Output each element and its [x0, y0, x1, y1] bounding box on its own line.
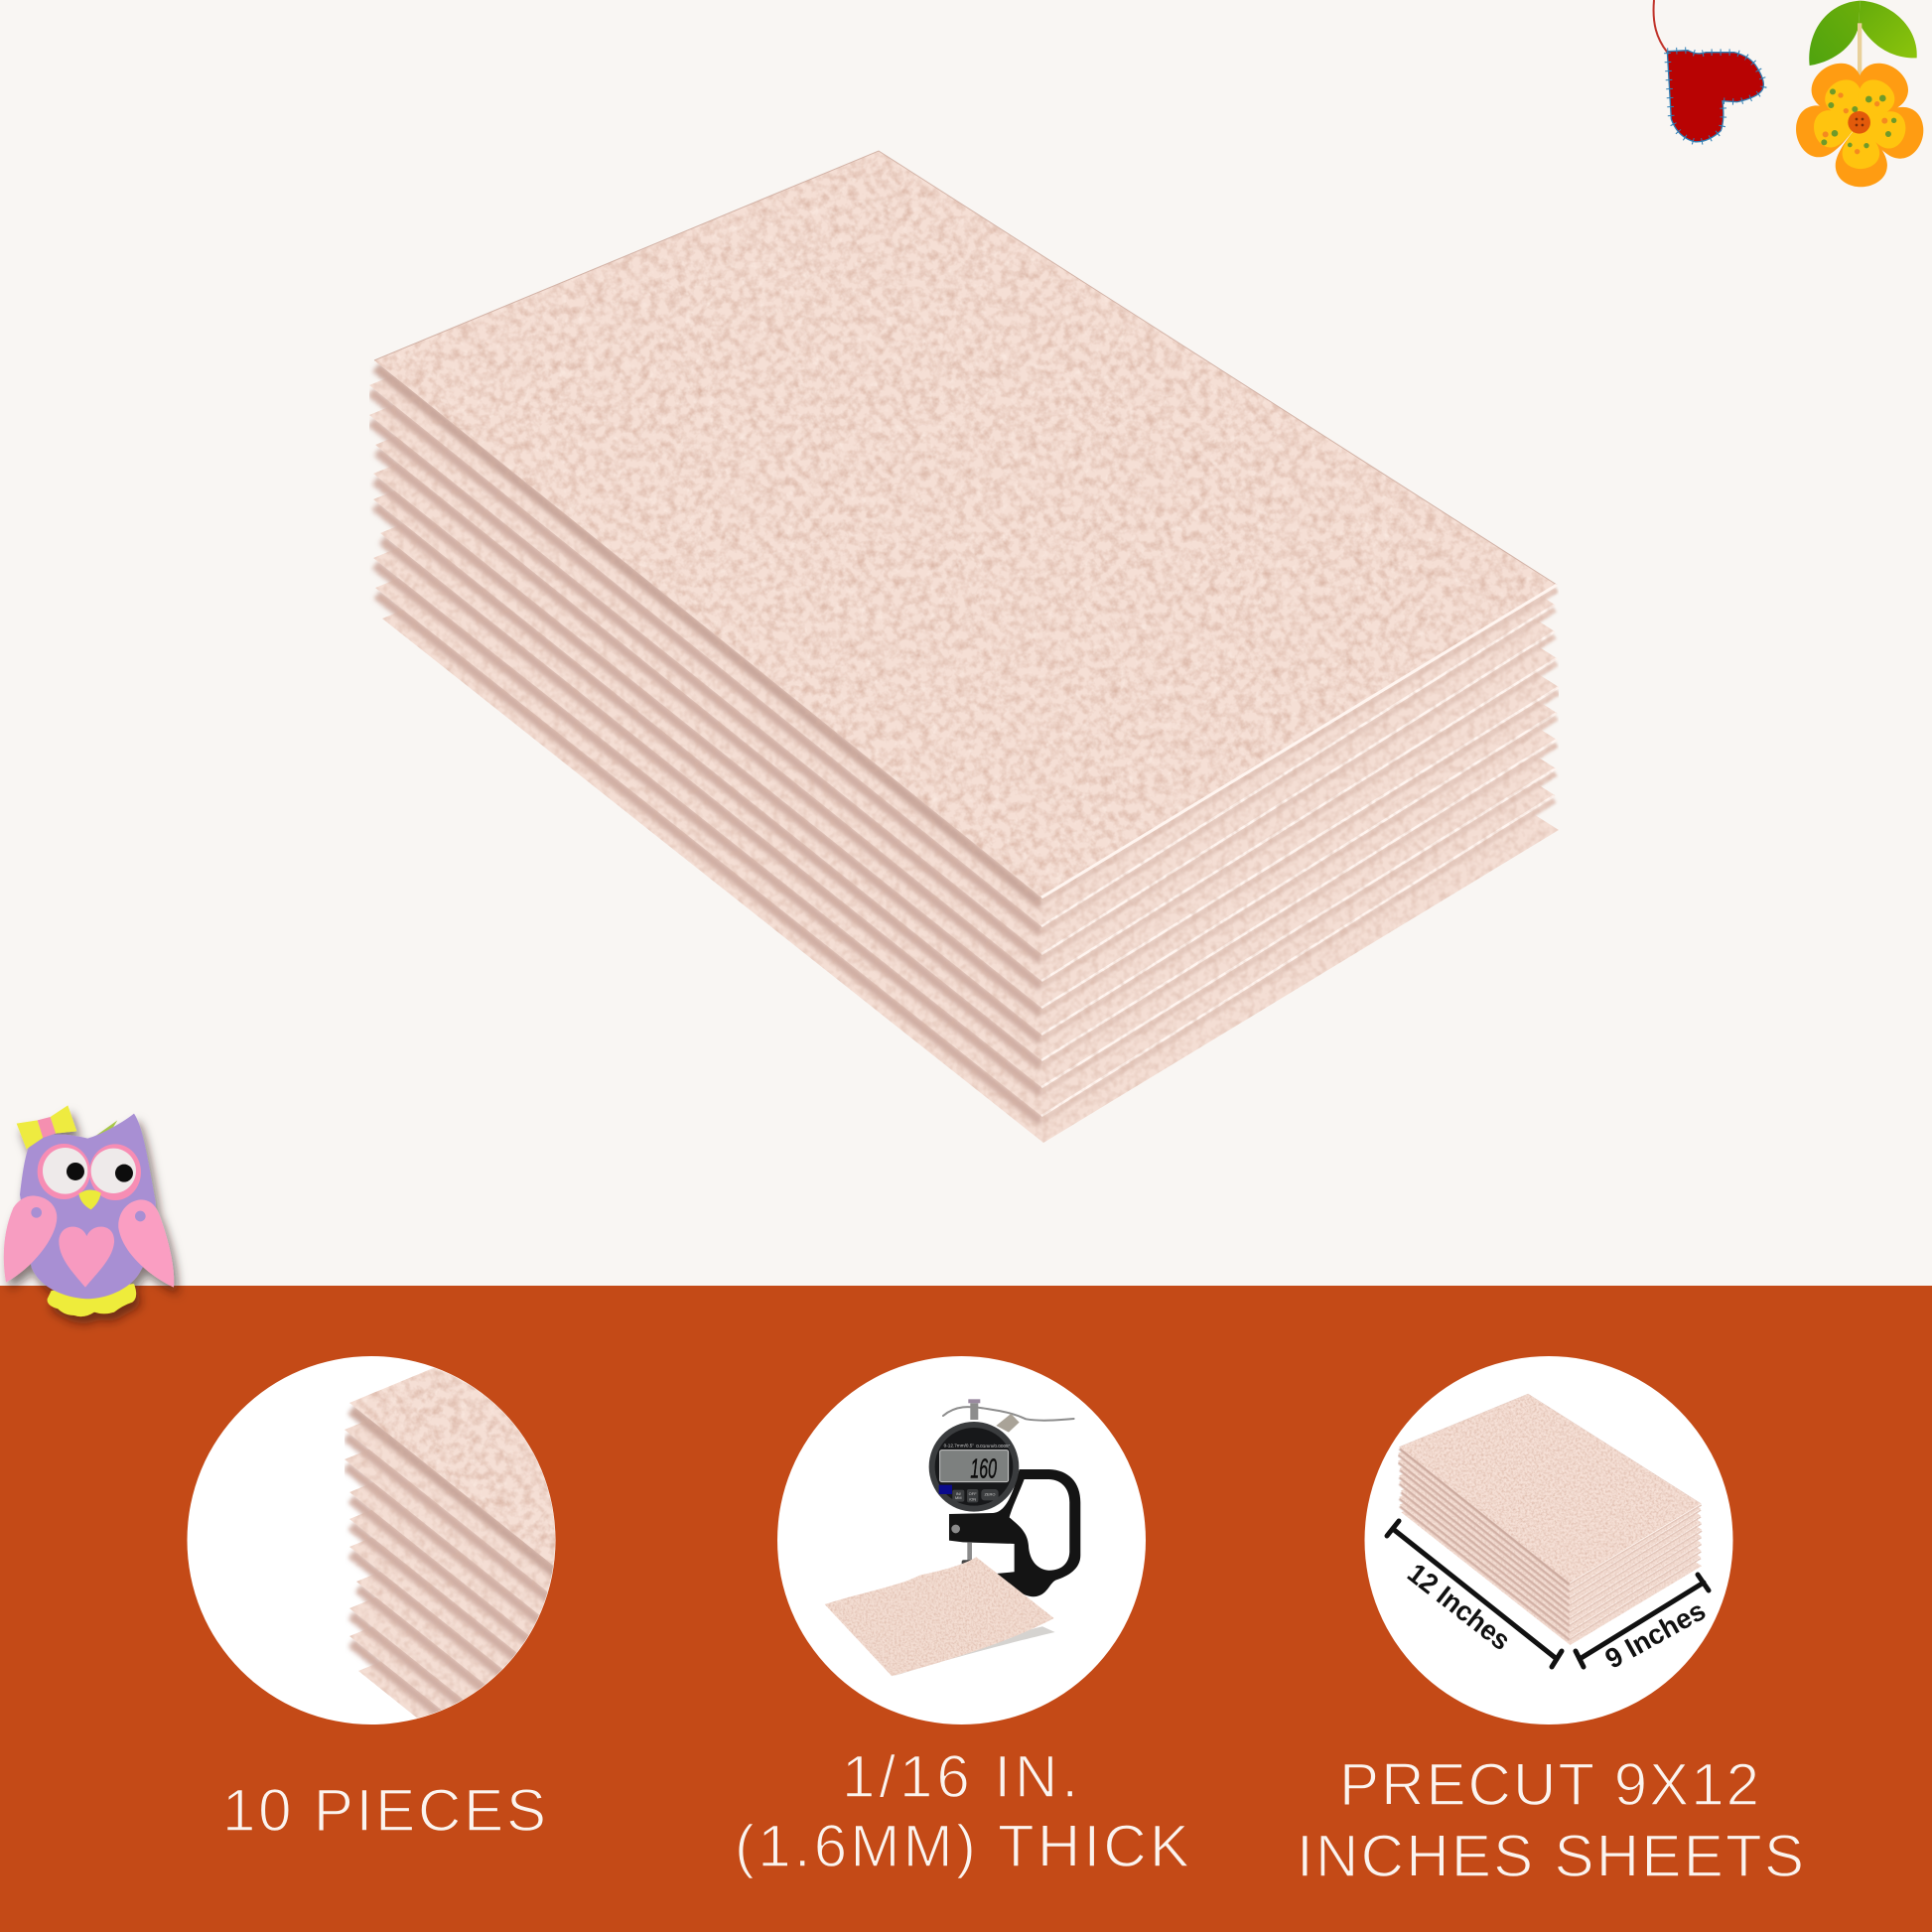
heading: precut sheets: INCHES SHEETS	[1297, 1823, 1804, 1889]
icon: felt owl	[4, 1105, 174, 1316]
heading: 10 pieces: 10 PIECES	[222, 1777, 546, 1844]
function buttons: /ON	[969, 1496, 976, 1501]
body	[20, 1114, 156, 1299]
background	[0, 0, 1932, 1287]
close-up of stacked sheet edges	[345, 1368, 555, 1718]
label: 12 inches: 12 Inches	[1402, 1558, 1516, 1656]
dimension line: 9 inches	[1576, 1575, 1709, 1667]
heading: 1/16 in thick: (1.6MM) THICK	[735, 1813, 1189, 1879]
beak	[78, 1190, 101, 1209]
heading: precut sheets	[1297, 1751, 1804, 1889]
yellow petals	[1811, 73, 1909, 170]
dial labels: 0-12.7mm/0.5"	[944, 1443, 974, 1448]
dimension line: 12 inches	[1387, 1521, 1562, 1667]
display	[940, 1450, 1009, 1482]
button	[1848, 111, 1870, 134]
leaf tuft	[94, 1120, 117, 1137]
gauge stem	[968, 1399, 1020, 1433]
reading: 160	[970, 1453, 997, 1484]
felt sample sheet	[825, 1557, 1055, 1676]
heart	[59, 1227, 114, 1288]
orange petals	[1791, 55, 1929, 188]
right wing	[118, 1199, 174, 1288]
function buttons: IN/	[956, 1491, 962, 1496]
function buttons: OFF	[969, 1491, 977, 1496]
thickness gauge	[825, 1399, 1080, 1676]
function buttons: MM	[955, 1495, 962, 1500]
gauge dial	[929, 1422, 1019, 1512]
panel: thickness gauge circle	[777, 1356, 1146, 1725]
icon: red felt heart	[1654, 0, 1763, 142]
bottom band	[0, 1286, 1932, 1932]
gauge lever	[943, 1407, 1074, 1421]
label: 9 inches: 9 Inches	[1600, 1594, 1711, 1675]
main felt sheet stack	[369, 151, 1559, 1143]
leaves	[1809, 1, 1917, 66]
clamp screw	[951, 1525, 960, 1533]
gauge spindle	[962, 1542, 977, 1566]
icon: felt flower with green leaves	[1791, 1, 1929, 188]
feet	[48, 1284, 136, 1316]
gauge frame	[949, 1469, 1080, 1596]
panel: 10 pieces circle	[187, 1354, 561, 1733]
heading: 1/16 in thick: 1/16 IN.	[842, 1743, 1078, 1810]
eyes	[38, 1144, 141, 1200]
resolution label: 0.01mm/0.0005"	[976, 1444, 1011, 1449]
stem	[1858, 23, 1862, 96]
function buttons	[952, 1489, 999, 1502]
heading: precut sheets: PRECUT 9X12	[1339, 1751, 1759, 1818]
function buttons: ZERO	[984, 1492, 996, 1497]
panel: dimensions circle	[1364, 1356, 1733, 1725]
wing buttons	[31, 1207, 146, 1221]
petal dots	[1821, 88, 1896, 148]
blue button	[939, 1485, 952, 1494]
small felt stack	[1398, 1394, 1702, 1645]
left wing	[4, 1195, 57, 1283]
bow	[17, 1105, 76, 1149]
heading: 1/16 in thick	[735, 1743, 1189, 1879]
